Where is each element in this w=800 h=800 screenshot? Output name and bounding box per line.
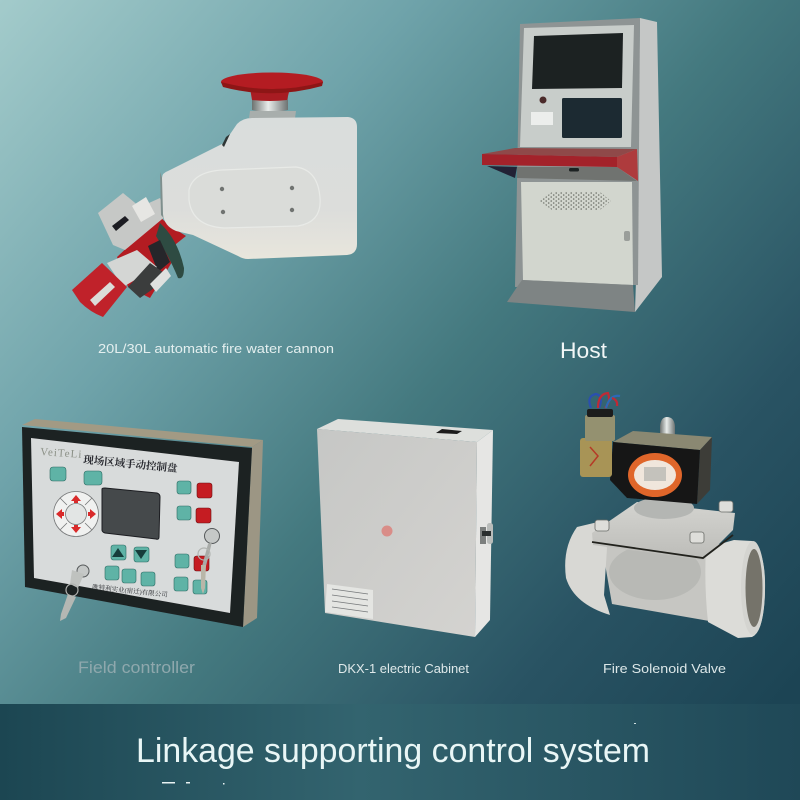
caption: cannon: 20L/30L automatic fire water cannon [98,341,334,356]
cannon mounting flange [221,72,323,118]
host vent [540,192,611,210]
caption: electric cabinet: DKX-1 electric Cabinet [338,662,470,676]
controller direction pad [54,492,98,536]
valve chrome dome [660,417,675,442]
valve solenoid head [610,431,712,504]
host button [540,96,546,104]
cabinet front [317,429,477,637]
host lower door [521,182,633,285]
controller brand: VeiTeLi [40,446,83,461]
controller left key [60,565,89,621]
host red shelf [482,148,638,181]
cabinet latch [480,523,493,544]
valve bonnet plate [592,497,735,560]
controller LCD screen [102,488,160,539]
controller up and down arrows [112,548,147,559]
host front frame [515,18,640,287]
caption: field controller: Field controller [78,658,195,677]
cabinet side [475,430,493,637]
controller faceplate [31,438,239,613]
host side panel [635,18,662,312]
valve coil connector [580,409,615,477]
cabinet top [317,419,493,442]
host touch screen [562,98,622,138]
cabinet cable slot [436,429,462,434]
host door lock [624,231,630,241]
host printer [531,112,553,125]
product: solenoid valve [565,393,765,638]
valve bolts [595,501,733,543]
valve pipe body [565,522,765,638]
title band [0,704,800,800]
host base [507,280,635,312]
product: host cabinet [482,18,662,312]
host main monitor [532,33,623,89]
caption: solenoid valve: Fire Solenoid Valve [603,661,726,676]
cabinet label [325,584,373,619]
valve orange label [628,453,682,497]
controller casing [22,419,263,627]
cabinet warning seal [382,526,392,536]
controller right key [198,528,220,594]
title: Linkage supporting control system [136,732,650,770]
controller teal buttons [50,467,207,594]
product: electric cabinet [317,419,493,637]
product: field controller [22,419,263,627]
controller red buttons [194,483,212,571]
cannon white housing [160,117,357,259]
host upper panel [520,25,634,147]
valve wires [589,393,620,408]
controller company name: 唯特利实业(宿迁)有限公司 [92,582,168,599]
caption: host: Host [560,338,607,363]
cannon nozzle assembly [72,193,186,317]
product: automatic fire water cannon [72,72,357,317]
controller title: 现场区域手动控制盘 [83,453,179,475]
